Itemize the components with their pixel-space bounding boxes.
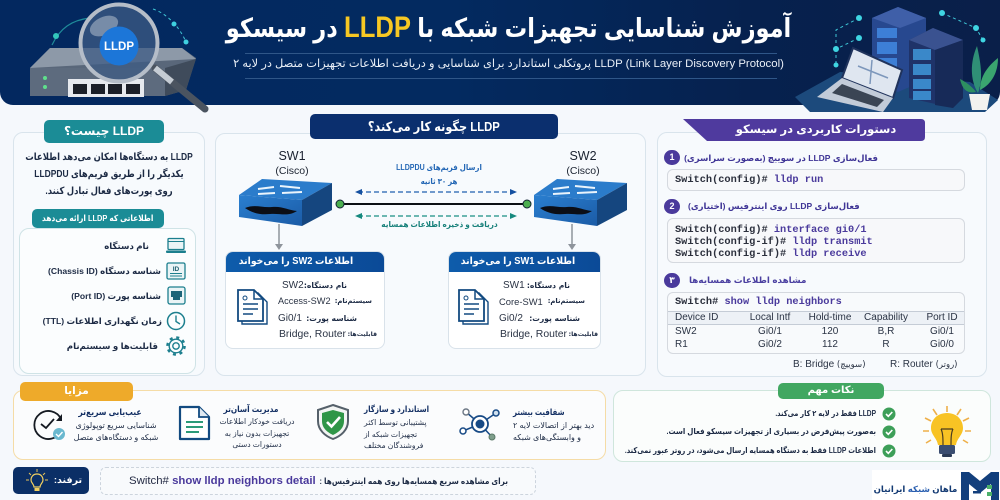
header background bbox=[0, 0, 1000, 105]
panel frame bbox=[613, 390, 991, 462]
panel frame bbox=[13, 390, 606, 460]
note 2: به‌صورت پیش‌فرض در بسیاری از تجهیزات سیسکو فعال است. bbox=[667, 427, 876, 436]
cell: R bbox=[882, 339, 890, 350]
header banner bbox=[0, 0, 1000, 112]
panel heading bbox=[20, 382, 133, 401]
icon: port bbox=[167, 286, 186, 305]
row: system name: سیستم‌نام: bbox=[335, 297, 372, 305]
benefit title: عیب‌یابی سریع‌تر bbox=[78, 407, 142, 417]
item: port id: شناسه پورت (Port ID) bbox=[71, 291, 161, 301]
benefit: standard bbox=[364, 402, 449, 456]
legend: bridge: B: Bridge (سوییچ) bbox=[793, 359, 866, 370]
benefit text: تجهیزات شبکه از bbox=[364, 430, 417, 439]
benefit text bbox=[217, 416, 297, 452]
card heading bbox=[226, 252, 384, 272]
step 1 title: فعال‌سازی LLDP در سوییچ (به‌صورت سراسری) bbox=[684, 153, 878, 163]
row: device name: SW2 bbox=[282, 280, 304, 290]
cell: Gi0/1 bbox=[758, 326, 782, 337]
icon: tip bulb bbox=[26, 469, 48, 492]
row: capabilities: Bridge, Router bbox=[500, 328, 567, 340]
panel frame bbox=[657, 132, 987, 377]
tip content box bbox=[100, 467, 536, 495]
label: SW1: (Cisco) bbox=[275, 164, 309, 176]
illustration: servers and laptop bbox=[795, 7, 998, 112]
code lines: Switch(config)# interface gi0/1 Switch(config-if)# lldp transmit Switch(config-if)# lldp receive bbox=[675, 224, 873, 260]
step 2 badge: 2 bbox=[669, 201, 674, 211]
label: SW1: SW1 bbox=[278, 149, 306, 163]
code box 1 bbox=[667, 169, 965, 191]
label: SW2: (Cisco) bbox=[566, 164, 600, 176]
step 3 badge bbox=[664, 273, 680, 288]
label: SW2 bbox=[566, 149, 600, 176]
label: send frames bbox=[396, 163, 482, 186]
icon: clock with check bbox=[30, 409, 68, 443]
label: send frames: هر ۳۰ ثانیه bbox=[421, 177, 457, 186]
benefit: troubleshooting bbox=[71, 404, 153, 454]
icon: documents bbox=[458, 289, 489, 325]
arrow: SW2 down bbox=[568, 224, 576, 250]
panel frame bbox=[13, 132, 205, 376]
column: capability: Capability bbox=[864, 312, 908, 323]
item: ttl: زمان نگهداری اطلاعات (TTL) bbox=[43, 316, 162, 326]
cell: Gi0/0 bbox=[930, 339, 954, 350]
header cells bbox=[675, 312, 958, 323]
icon: device bbox=[166, 238, 186, 253]
row: SW2 bbox=[675, 326, 954, 337]
step 2 title: فعال‌سازی LLDP روی اینترفیس (اختیاری) bbox=[688, 201, 860, 211]
provided information heading bbox=[32, 209, 164, 228]
neighbors table bbox=[667, 292, 965, 354]
benefit text bbox=[364, 417, 444, 453]
diagram: switches and link bbox=[239, 179, 627, 250]
benefit text: شبکه و دستگاه‌های متصل bbox=[74, 433, 158, 442]
benefit text: فروشندگان مختلف bbox=[364, 441, 423, 450]
label: SW2: SW2 bbox=[569, 149, 597, 163]
benefit text bbox=[513, 421, 594, 442]
illustration: router with magnifier: LLDP bbox=[104, 41, 134, 53]
row: device name bbox=[503, 280, 570, 290]
panel heading bbox=[683, 119, 925, 141]
tip label bbox=[13, 467, 89, 494]
arrow: LLDPDU frames bbox=[355, 189, 517, 195]
panel heading: LLDP چیست؟ bbox=[64, 124, 144, 138]
icon: shield bbox=[316, 404, 350, 440]
icon: gear bbox=[166, 336, 186, 356]
row: capabilities bbox=[500, 328, 598, 340]
row: system name: Core-SW1 bbox=[499, 296, 543, 306]
description text: یکدیگر را از طریق فریم‌های LLDPDU bbox=[34, 169, 184, 180]
row: device name bbox=[282, 280, 347, 290]
row: port id bbox=[278, 312, 357, 324]
benefit text: شناسایی سریع توپولوژی bbox=[75, 421, 157, 430]
benefit text: دریافت خودکار اطلاعات bbox=[219, 417, 295, 426]
benefit text: دید بهتر از اتصالات لایه ۲ bbox=[513, 421, 594, 430]
row: R1 bbox=[675, 339, 954, 350]
card heading text: اطلاعات SW1 را می‌خواند bbox=[461, 256, 575, 267]
row: system name bbox=[278, 296, 372, 306]
row: system name bbox=[499, 296, 585, 306]
cell: Gi0/2 bbox=[758, 339, 782, 350]
description text bbox=[25, 150, 193, 197]
panel heading bbox=[44, 120, 164, 143]
row: capabilities: قابلیت‌ها: bbox=[569, 330, 598, 338]
panel: Cisco commands bbox=[657, 119, 987, 377]
benefit: management bbox=[217, 402, 297, 456]
cell: R1 bbox=[675, 339, 688, 350]
cell: SW2 bbox=[675, 326, 697, 337]
label: receive and store: دریافت و ذخیره اطلاعات همسایه bbox=[381, 220, 498, 229]
switch SW2 bbox=[534, 179, 627, 226]
benefit title: استاندارد و سازگار bbox=[364, 404, 429, 414]
item: chassis id: شناسه دستگاه (Chassis ID) bbox=[48, 266, 161, 276]
benefit text: پشتیبانی توسط اکثر bbox=[364, 418, 427, 427]
row: port id: شناسه پورت: bbox=[306, 314, 357, 322]
row: port id: Gi0/2 bbox=[499, 312, 523, 324]
row: device name: نام دستگاه: bbox=[527, 280, 570, 290]
column: local intf: Local Intf bbox=[750, 312, 790, 323]
code line: Switch(config)# lldp run bbox=[675, 174, 823, 186]
label: SW1 bbox=[275, 149, 309, 176]
logo mark bbox=[960, 471, 1000, 500]
provided information box bbox=[19, 228, 196, 374]
panel: what is LLDP bbox=[13, 120, 205, 376]
logo text: ماهان شبکه ایرانیان bbox=[874, 484, 957, 494]
panel heading bbox=[310, 114, 558, 139]
logo bbox=[872, 470, 1000, 500]
benefit text: دستورات دستی bbox=[232, 440, 282, 449]
cell: B,R bbox=[878, 326, 894, 337]
panel heading bbox=[778, 383, 884, 399]
panel heading: نکات مهم bbox=[808, 385, 854, 396]
row: capabilities: قابلیت‌ها: bbox=[348, 330, 377, 338]
card heading bbox=[449, 252, 600, 272]
row: port id: Gi0/1 bbox=[278, 312, 302, 324]
description text: LLDP به دستگاه‌ها امکان می‌دهد اطلاعات bbox=[25, 152, 193, 163]
benefit title: مدیریت آسان‌تر bbox=[224, 404, 278, 414]
cell: 120 bbox=[822, 326, 838, 337]
title: آموزش شناسایی تجهیزات شبکه با LLDP در سیسکو bbox=[226, 11, 791, 44]
panel frame bbox=[215, 133, 646, 376]
item: capabilities: قابلیت‌ها و سیستم‌نام bbox=[67, 341, 158, 351]
arrow: SW1 down bbox=[275, 224, 283, 250]
description text: روی پورت‌های فعال تبادل کنند. bbox=[45, 186, 173, 197]
step 1 badge bbox=[664, 150, 680, 165]
benefit title: شفافیت بیشتر bbox=[513, 407, 565, 417]
panel heading: LLDP چگونه کار می‌کند؟ bbox=[368, 119, 500, 134]
note 3: اطلاعات LLDP فقط به دستگاه همسایه ارسال می‌شود، در روتر عبور نمی‌کند. bbox=[625, 446, 876, 455]
illustration: router with magnifier bbox=[30, 2, 208, 112]
tip command: Switch# show lldp neighbors detail bbox=[129, 475, 316, 487]
benefit text bbox=[72, 420, 160, 446]
card: SW2 info bbox=[225, 251, 385, 349]
icon: id card: ID bbox=[173, 266, 180, 273]
row: port id bbox=[499, 312, 580, 324]
card: SW1 info bbox=[448, 251, 601, 349]
link cable bbox=[336, 200, 531, 208]
note 1: LLDP فقط در لایه ۲ کار می‌کند. bbox=[775, 409, 876, 418]
column: hold-time: Hold-time bbox=[809, 312, 851, 323]
row: port id: شناسه پورت: bbox=[529, 314, 580, 322]
card heading text: اطلاعات SW2 را می‌خواند bbox=[239, 256, 353, 267]
icon: id card bbox=[166, 262, 186, 280]
panel: important notes bbox=[613, 383, 992, 463]
header divider lines bbox=[245, 53, 777, 79]
command line: Switch# show lldp neighbors bbox=[675, 296, 842, 308]
cell: Gi0/1 bbox=[930, 326, 954, 337]
panel heading: مزایا bbox=[64, 385, 89, 397]
step 1 badge: 1 bbox=[669, 152, 674, 162]
row: capabilities: Bridge, Router bbox=[279, 328, 346, 340]
step 3 badge: ۳ bbox=[669, 275, 675, 285]
panel heading text: دستورات کاربردی در سیسکو bbox=[736, 124, 896, 136]
tip description: برای مشاهده سریع همسایه‌ها روی همه اینترفیس‌ها : bbox=[319, 476, 508, 486]
row: device name: SW1 bbox=[503, 280, 525, 290]
icon: clock bbox=[166, 312, 186, 330]
provided information heading: اطلاعاتی که LLDP ارائه می‌دهد bbox=[42, 213, 154, 223]
step 2 badge bbox=[664, 199, 680, 214]
icon: network nodes bbox=[458, 404, 502, 444]
code box 2 bbox=[667, 218, 965, 263]
row: system name: Access-SW2 bbox=[278, 296, 331, 306]
arrow: neighbor info bbox=[355, 213, 517, 219]
check icons bbox=[882, 407, 897, 462]
benefit text: تجهیزات بدون نیاز به bbox=[225, 429, 289, 438]
icon: documents bbox=[237, 289, 268, 325]
label: send frames: ارسال فریم‌های LLDPDU bbox=[396, 163, 482, 172]
legend: router: R: Router (روتر) bbox=[890, 359, 958, 370]
cell: 112 bbox=[822, 339, 838, 350]
column: device id: Device ID bbox=[675, 312, 718, 323]
switch SW1 bbox=[239, 179, 332, 226]
item: device name: نام دستگاه bbox=[104, 241, 149, 251]
step 3 title: مشاهده اطلاعات همسایه‌ها bbox=[689, 275, 806, 285]
subtitle: LLDP (Link Layer Discovery Protocol) پروتکلی استاندارد برای شناسایی و دریافت اطلاعات تجهیزات متصل در لایه ۲ bbox=[233, 58, 784, 70]
benefit: visibility bbox=[512, 407, 594, 442]
table header row bbox=[668, 311, 964, 325]
column: port id: Port ID bbox=[926, 312, 958, 323]
row: system name: سیستم‌نام: bbox=[548, 297, 585, 305]
row: capabilities bbox=[279, 328, 377, 340]
panel: how LLDP works bbox=[215, 114, 646, 376]
panel: benefits bbox=[13, 382, 606, 460]
tip text: ترفند: bbox=[54, 475, 82, 486]
icon: light bulb bbox=[922, 403, 974, 459]
row: device name: نام دستگاه: bbox=[304, 280, 347, 290]
icon: document bbox=[177, 405, 211, 441]
benefit text: و وابستگی‌های شبکه bbox=[513, 433, 581, 442]
